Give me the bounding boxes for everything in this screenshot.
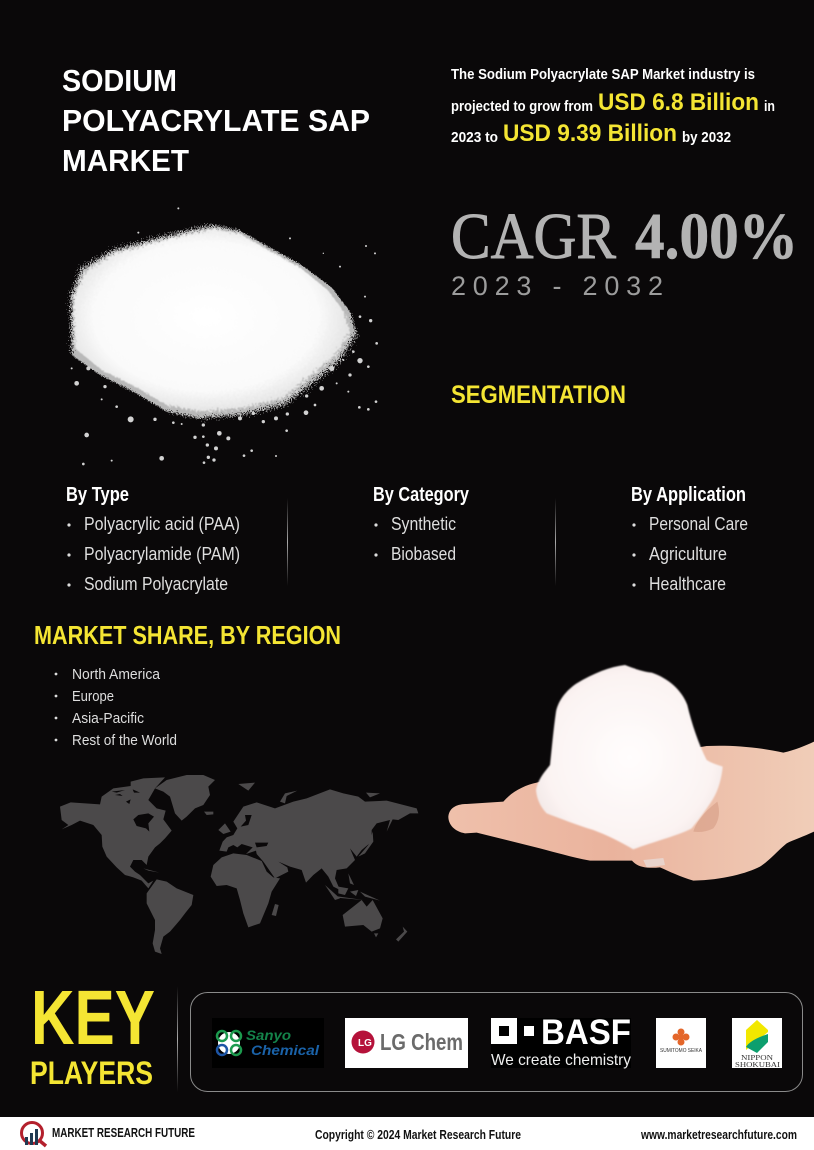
- region list: North America: [72, 666, 161, 683]
- column: by type: [66, 484, 240, 594]
- region list: Asia-Pacific: [72, 710, 144, 727]
- logo: Sumitomo Seika: [656, 1018, 706, 1068]
- market forecast text: by 2032: [682, 129, 731, 146]
- CAGR figure: CAGR: [451, 200, 616, 273]
- logo: Sanyo Chemical: Chemical: [251, 1042, 320, 1058]
- heading: segmentation: SEGMENTATION: [451, 381, 626, 409]
- image: hand holding swollen polymer gel: [448, 665, 814, 881]
- title: MARKET: [62, 143, 189, 178]
- column: by type: By Type: [66, 484, 129, 506]
- column: by category: Biobased: [391, 544, 456, 564]
- CAGR figure: 4.00%: [635, 200, 798, 273]
- logo: Nippon Shokubai: [732, 1018, 782, 1069]
- footer bar: Copyright © 2024 Market Research Future: [315, 1128, 521, 1142]
- title: SODIUM: [62, 63, 177, 98]
- logo: BASF: BASF: [541, 1013, 631, 1052]
- logo: Nippon Shokubai: SHOKUBAI: [735, 1061, 781, 1069]
- CAGR figure: [451, 200, 798, 301]
- heading: market share by region: MARKET SHARE, BY REGION: [34, 620, 341, 650]
- heading: key players: [30, 975, 155, 1091]
- logo: Sumitomo Seika: SUMITOMO SEIKA: [660, 1048, 703, 1054]
- logo: BASF: We create chemistry: [491, 1052, 631, 1069]
- region list: Europe: [72, 688, 114, 705]
- title: POLYACRYLATE SAP: [62, 103, 370, 138]
- column: by type: Polyacrylamide (PAM): [84, 544, 240, 564]
- column: by application: Agriculture: [649, 544, 727, 564]
- logo: Nippon Shokubai: NIPPON: [741, 1054, 773, 1062]
- heading: key players: KEY: [31, 975, 155, 1061]
- logo: Sanyo Chemical: [212, 1018, 324, 1068]
- column: by type: Sodium Polyacrylate: [84, 574, 228, 594]
- column: by application: Healthcare: [649, 574, 726, 594]
- logo: Sanyo Chemical: Sanyo: [246, 1027, 291, 1043]
- CAGR figure: 2023 - 2032: [451, 271, 663, 301]
- market forecast text: USD 9.39 Billion: [503, 120, 677, 147]
- column: by application: Personal Care: [649, 514, 748, 534]
- region list: Rest of the World: [72, 732, 177, 749]
- column: by application: [631, 484, 748, 594]
- image: sodium polyacrylate powder pile: [71, 207, 378, 465]
- logo: LG Chem: [345, 1018, 468, 1068]
- heading: key players: PLAYERS: [30, 1055, 153, 1091]
- column: by category: [373, 484, 470, 564]
- icon: market research future logo: [22, 1122, 46, 1146]
- world map: [60, 775, 418, 954]
- logo: LG Chem: LG Chem: [380, 1029, 463, 1055]
- market forecast text: in: [764, 98, 775, 115]
- market forecast text: 2023 to: [451, 129, 498, 146]
- market forecast text: The Sodium Polyacrylate SAP Market industry is: [451, 66, 755, 83]
- market forecast text: USD 6.8 Billion: [598, 89, 759, 116]
- column: by category: Synthetic: [391, 514, 456, 534]
- logo: LG Chem: LG: [358, 1038, 372, 1049]
- title: [62, 63, 370, 178]
- footer bar: MARKET RESEARCH FUTURE: [52, 1126, 195, 1140]
- market forecast text: [451, 66, 775, 147]
- column: by category: By Category: [373, 484, 470, 506]
- region list: [55, 666, 177, 749]
- panel: key player logos: [190, 992, 802, 1092]
- market forecast text: projected to grow from: [451, 98, 593, 115]
- column: by type: Polyacrylic acid (PAA): [84, 514, 240, 534]
- logo: BASF: [491, 1013, 631, 1069]
- column: by application: By Application: [631, 484, 746, 506]
- footer bar: [0, 1117, 814, 1150]
